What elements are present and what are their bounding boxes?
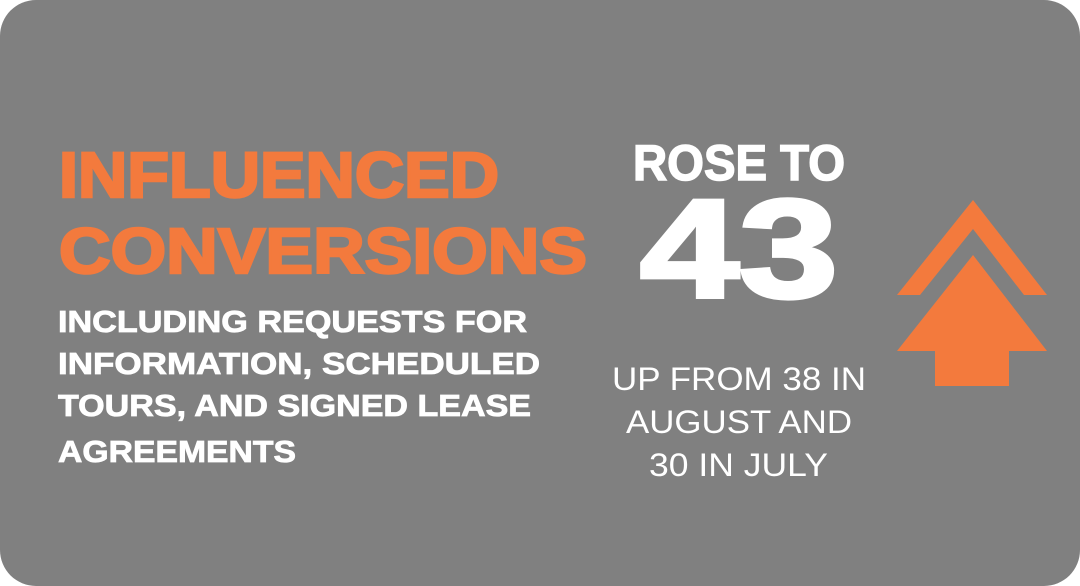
stat: rose to 43: 43 xyxy=(640,170,838,327)
text block: comparison: 30 IN JULY xyxy=(649,447,828,483)
heading: influenced conversions xyxy=(59,139,587,287)
text block: description: TOURS, AND SIGNED LEASE xyxy=(58,388,531,423)
text block: comparison: UP FROM 38 IN xyxy=(612,361,866,397)
text block: description: INFORMATION, SCHEDULED xyxy=(58,346,540,381)
icon: up arrow xyxy=(897,200,1047,386)
text block: description xyxy=(58,304,540,469)
heading: influenced conversions: CONVERSIONS xyxy=(59,215,587,287)
stat: rose to 43: ROSE TO xyxy=(633,135,845,191)
text block: description: INCLUDING REQUESTS FOR xyxy=(58,304,527,339)
text block: comparison xyxy=(612,361,866,483)
heading: influenced conversions: INFLUENCED xyxy=(59,139,499,211)
text block: description: AGREEMENTS xyxy=(58,434,296,469)
text block: comparison: AUGUST AND xyxy=(626,404,852,440)
stat: rose to 43 xyxy=(633,135,845,327)
